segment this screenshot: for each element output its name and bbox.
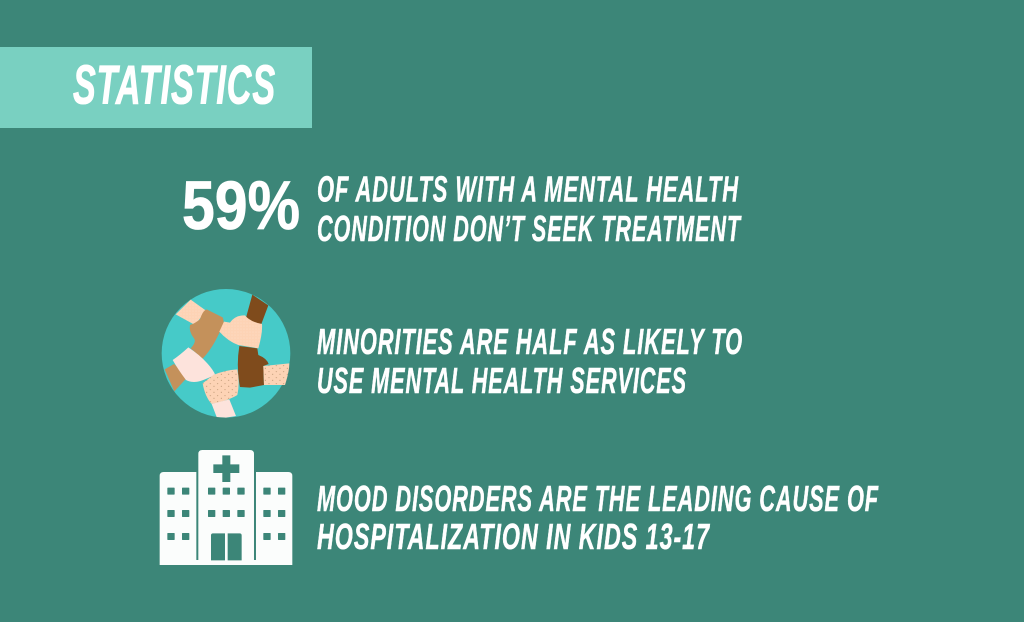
bottom pale forearm [212,399,236,418]
stat: 59% of adults [182,167,742,249]
stat: mood disorders: HOSPITALIZATION IN KIDS 13-17 [317,516,710,557]
stat: mood disorders [317,478,879,557]
stat: minorities [317,321,743,401]
right peach forearm [263,363,289,385]
stat: 59% of adults: CONDITION DON’T SEEK TREATMENT [317,208,742,249]
lower peach fist [203,369,239,404]
pale fist [173,347,215,382]
top-left forearm [176,300,206,325]
stat: minorities: USE MENTAL HEALTH SERVICES [317,360,687,401]
stat: minorities: MINORITIES ARE HALF AS LIKELY TO [317,321,743,362]
stat: 59% of adults: OF ADULTS WITH A MENTAL HEALTH [317,168,739,210]
top-right dark forearm [245,295,268,325]
tan fist [190,309,224,359]
heading banner: statistics [0,47,312,128]
icon: hospital building [160,450,292,565]
peach fist [219,315,262,348]
dark fist [238,346,269,388]
heading banner: statistics: STATISTICS [73,54,276,116]
icon: circle of linked hands [162,289,290,418]
lower-left tan forearm [165,364,187,391]
stat: 59% of adults: 59% [182,167,300,244]
